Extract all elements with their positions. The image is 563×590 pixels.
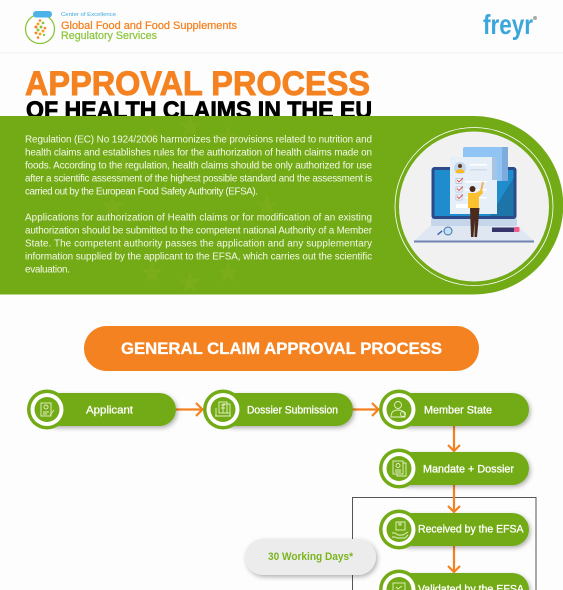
heading: general claim approval process (84, 326, 479, 371)
icon: food centre of excellence ring (26, 11, 54, 44)
step: member state (379, 390, 529, 430)
step: member state: Member State (424, 404, 492, 416)
logo text: global food: Global Food and Food Supplements (61, 20, 237, 32)
logo: freyr: freyr (483, 9, 533, 40)
arrow: dossier to member state (352, 403, 378, 416)
logo text: center of excellence: Center of Excellence (61, 12, 116, 18)
icon: signed document (41, 403, 54, 416)
step: mandate + dossier: Mandate + Dossier (423, 464, 514, 476)
step: mandate + dossier (379, 448, 529, 488)
text block: applications paragraph (25, 212, 373, 276)
title (25, 65, 372, 124)
text block: regulation paragraph: carried out by the European Food Safety Authority (EFSA). (25, 186, 258, 198)
logo: Global Food and Food Supplements (26, 11, 237, 44)
panel: introduction (0, 115, 563, 294)
text block: applications paragraph: evaluation. (25, 264, 70, 276)
text block: regulation paragraph: health claims and establishes rules for the authorization of health claims made on (25, 148, 372, 158)
decorative EU stars (102, 115, 278, 293)
icon: hand receiving box (392, 522, 408, 538)
step: received by the EFSA (379, 510, 529, 550)
arrow: applicant to dossier (176, 403, 202, 416)
step: applicant (27, 390, 176, 430)
text block: applications paragraph: information supplied by the applicant to the EFSA, which carries out the scientific (25, 252, 372, 262)
text block: applications paragraph: State. The competent authority passes the application and any supplementary (25, 238, 372, 250)
icon: mandate papers (393, 461, 406, 476)
text block: regulation paragraph: foods. According to the regulation, health claims should be only authorized for use (25, 160, 372, 172)
arrow: mandate to received (448, 485, 460, 512)
bracket: EFSA period frame (352, 498, 536, 590)
text block: applications paragraph: authorization should be submitted to the competent national Authority of a Member (25, 226, 373, 236)
arrow: member state to mandate (448, 426, 460, 451)
step: validated by the EFSA (379, 570, 529, 590)
text block: applications paragraph: Applications for authorization of Health claims or for modification of an existing (25, 212, 372, 224)
icon: official person (391, 402, 406, 417)
text block: regulation paragraph: Regulation (EC) No 1924/2006 harmonizes the provisions related to nutrition and (25, 134, 372, 146)
title line: of health claims: OF HEALTH CLAIMS IN THE EU (26, 97, 372, 124)
heading: general claim approval process: GENERAL CLAIM APPROVAL PROCESS (121, 340, 442, 358)
icon: dossier folders (215, 402, 231, 416)
title line: approval process: APPROVAL PROCESS (25, 65, 370, 103)
callout: 30 working days (245, 539, 376, 575)
step: dossier submission: Dossier Submission (247, 404, 338, 416)
text block: regulation paragraph: after a scientific assessment of the highest possible standard and the assessment is (25, 174, 372, 184)
text block: regulation paragraph (25, 134, 372, 198)
illustration: person reviewing documents on laptop (395, 128, 553, 286)
logo text: regulatory services: Regulatory Services (61, 30, 157, 42)
icon: validated document (393, 583, 405, 590)
step: applicant: Applicant (86, 404, 133, 416)
callout: 30 working days: 30 Working Days* (268, 551, 354, 563)
step: dossier submission (203, 390, 353, 430)
step: received by the EFSA: Received by the EFSA (418, 524, 524, 536)
arrow: received to validated (448, 546, 460, 572)
